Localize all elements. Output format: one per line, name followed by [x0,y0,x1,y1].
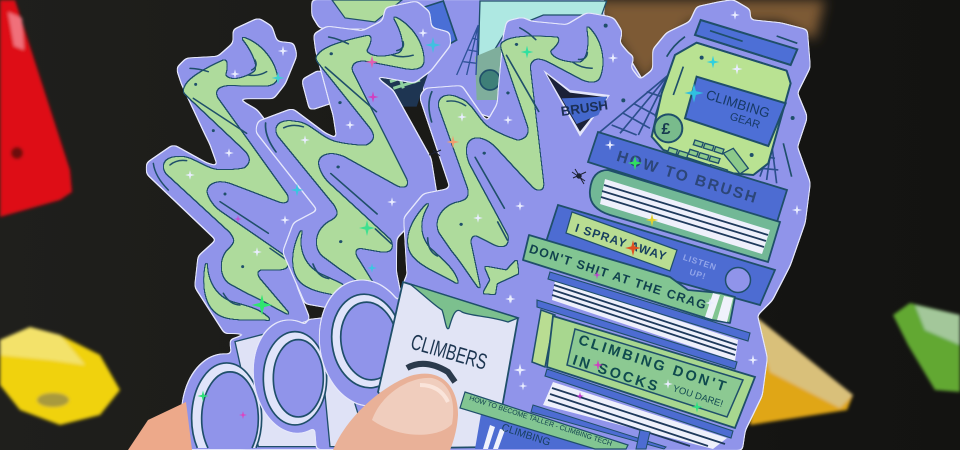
red climbing hold [0,0,72,217]
sticker: left slime and mug [147,18,337,449]
book: I spray away: I SPRAY AWAY [574,221,669,264]
left mug [192,330,322,448]
book: I spray away: UP! [688,267,708,282]
listen up label: LISTEN [682,252,718,272]
bricks [668,140,748,174]
book: how to brush [588,132,787,222]
sticker: main slime, mug and book stack silhouette [312,0,810,450]
back jar [478,1,607,60]
book: I spray away [545,205,775,305]
back web [457,25,479,75]
book: how to brush: HOW TO BRUSH [615,148,760,207]
book: bottom stack: CLIMBING [500,422,552,449]
book: don't shit at the crag [523,235,735,323]
middle slime drip [241,2,447,303]
spider web right [760,143,778,183]
hand at lower left [128,402,192,450]
book: climbing don't in socks: IN SOCKS [571,353,662,396]
book: climbing don't in socks: CLIMBING DON'T [576,332,730,396]
mug lettering hidden by finger [407,364,455,382]
main slime lines [354,3,618,279]
back coin [475,43,513,100]
back bricks [372,58,433,107]
spider web left [598,75,668,135]
coin with pound sign [654,114,682,142]
mug title: CLIMBERS [408,329,490,375]
gap showing back sticker with BRUSH: BRUSH [560,97,609,119]
jar lid [695,20,797,65]
mug body [378,282,518,448]
book: lower pages [531,369,733,449]
middle slime lines [232,22,438,288]
spider [429,150,586,184]
mug slime [410,284,518,329]
book: bottom stack: HOW TO BECOME TALLER - CLIMBING TECH [468,395,613,448]
mug handle [326,290,408,392]
back slime fragment [332,0,402,22]
book: climbing don't in socks [532,310,755,428]
jar label [685,77,786,146]
thumb [333,374,458,450]
book: climbing don't in socks: YOU DARE! [671,383,724,410]
gold climbing hold [750,316,853,425]
book: white pages and blue covers [537,272,750,369]
coin with pound sign: £ [662,121,671,138]
jar and spider web [598,20,797,183]
brown background blur [590,0,825,85]
main slime drip [356,0,634,294]
left slime drip [164,37,290,320]
back stickers peeking at top [302,0,645,122]
mug with handle [326,282,518,448]
left slime lines [153,60,287,305]
sticker: middle slime and mug [218,0,481,449]
green climbing hold [893,303,960,392]
yellow climbing hold [0,327,120,425]
jar label: GEAR [728,111,762,131]
jar label: CLIMBING [704,87,772,121]
book: white pages with green cover [590,170,780,262]
jar body [652,43,791,175]
middle mug [263,332,368,447]
gap showing back sticker with BRUSH [543,70,610,137]
book: don't shit at the crag: DON'T SHIT AT THE CRAG [527,242,709,313]
jar lid band [697,31,797,71]
holographic sparkles [185,10,802,419]
back jar label [415,1,457,55]
